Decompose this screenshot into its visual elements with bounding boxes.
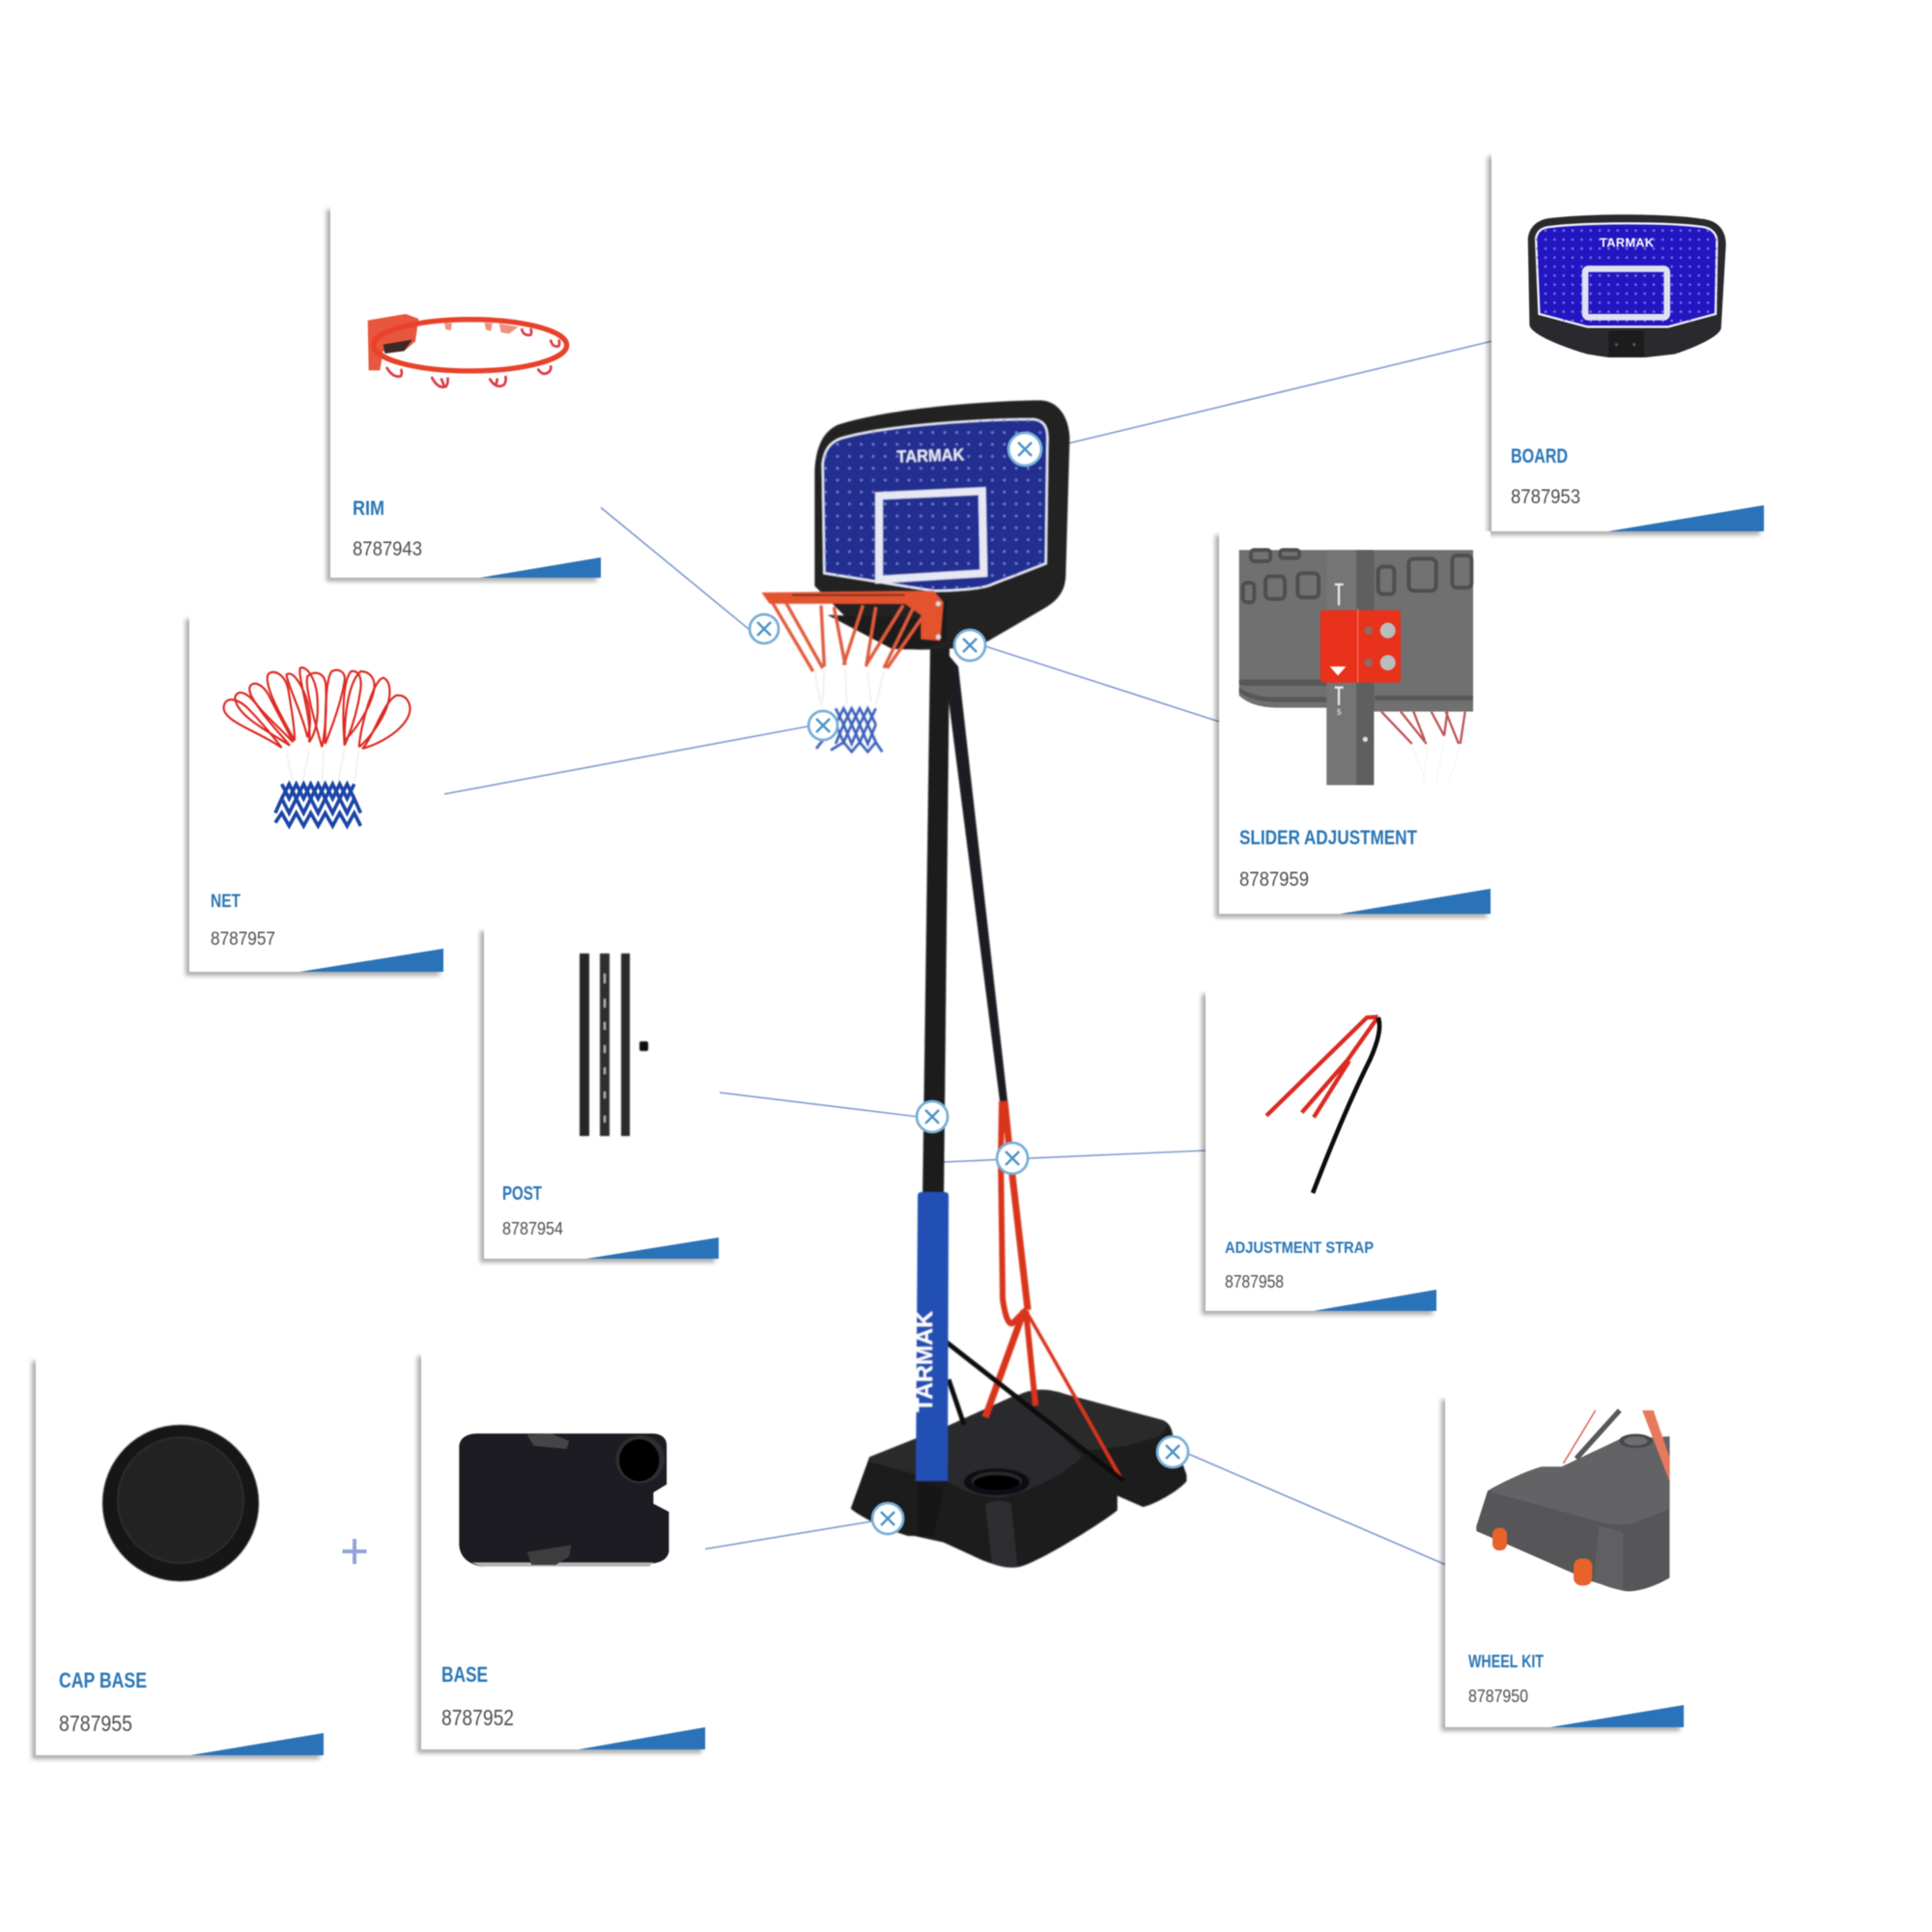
post padding <box>916 1192 949 1481</box>
accent wedge <box>586 1237 719 1259</box>
icon: cap <box>102 1425 259 1581</box>
card background <box>1206 990 1436 1311</box>
panel: base <box>421 1352 705 1749</box>
part number: 8787953 <box>1511 486 1580 508</box>
heading: BOARD <box>1511 445 1568 468</box>
accent wedge <box>579 1727 705 1749</box>
panel: post <box>484 927 719 1259</box>
padding logo: TARMAK <box>912 1310 938 1412</box>
card background <box>36 1357 324 1755</box>
icon: rim <box>368 314 567 387</box>
card background <box>484 927 719 1259</box>
accent wedge <box>480 557 601 578</box>
card background <box>1445 1396 1684 1727</box>
panel: adjustment strap <box>1206 990 1436 1311</box>
panel: net <box>189 615 443 972</box>
accent wedge <box>1550 1705 1684 1727</box>
main product: basketball hoop <box>761 400 1186 1568</box>
rim and net <box>761 591 947 752</box>
panel: slider adjustment <box>1219 531 1491 914</box>
heading: BASE <box>441 1662 488 1687</box>
marker: strap <box>997 1143 1028 1174</box>
card background <box>1492 153 1764 531</box>
black rods <box>945 1341 1123 1481</box>
accent wedge <box>190 1733 324 1755</box>
marker: wheel kit <box>1157 1436 1188 1467</box>
icon: board: TARMAK <box>1600 237 1655 250</box>
panel: cap base <box>36 1357 324 1755</box>
marker: board <box>1009 433 1041 466</box>
accent wedge <box>1608 505 1764 531</box>
backboard: TARMAK <box>896 444 965 467</box>
panel: wheel kit <box>1445 1396 1684 1727</box>
base <box>851 1390 1186 1568</box>
marker: rim <box>750 614 779 643</box>
icon: net <box>224 668 410 826</box>
icon: wheel kit <box>1476 1410 1674 1591</box>
main post <box>923 642 950 1198</box>
connector lines <box>444 341 1492 1565</box>
card background <box>330 206 601 578</box>
icon: plus sign <box>342 1539 367 1564</box>
heading: NET <box>211 892 241 912</box>
icon: strap <box>1266 1017 1379 1193</box>
card background <box>1219 531 1491 914</box>
panel: board <box>1492 153 1764 531</box>
panel: rim <box>330 206 601 578</box>
part number: 8787950 <box>1468 1687 1528 1706</box>
icon: slider adjustment photo <box>1239 550 1473 785</box>
part number: 8787952 <box>441 1705 514 1730</box>
icon: post sections <box>580 953 648 1136</box>
card background <box>421 1352 705 1749</box>
part number: 8787955 <box>59 1711 132 1736</box>
part number: 8787957 <box>211 929 275 950</box>
part number: 8787943 <box>353 538 422 560</box>
accent wedge <box>1340 889 1491 914</box>
part number: 8787958 <box>1225 1272 1284 1292</box>
marker: base <box>872 1503 903 1534</box>
icon: base <box>459 1434 668 1567</box>
heading: POST <box>502 1183 542 1205</box>
accent wedge <box>1314 1290 1436 1311</box>
marker: net <box>809 711 838 740</box>
marker: slider <box>954 630 985 661</box>
heading: CAP BASE <box>59 1668 147 1692</box>
heading: WHEEL KIT <box>1468 1652 1544 1671</box>
part number: 8787954 <box>502 1219 563 1238</box>
icon: board <box>1528 214 1726 357</box>
backboard <box>814 400 1069 649</box>
second pole <box>942 647 1008 1101</box>
heading: ADJUSTMENT STRAP <box>1225 1238 1374 1257</box>
card background <box>189 615 443 972</box>
icon: slider adjustment photo: 5 <box>1337 708 1342 717</box>
heading: RIM <box>353 497 384 520</box>
marker: post <box>917 1101 948 1132</box>
red strap <box>985 1101 1122 1481</box>
accent wedge <box>299 949 443 972</box>
part number: 8787959 <box>1239 868 1309 891</box>
heading: SLIDER ADJUSTMENT <box>1239 827 1417 849</box>
